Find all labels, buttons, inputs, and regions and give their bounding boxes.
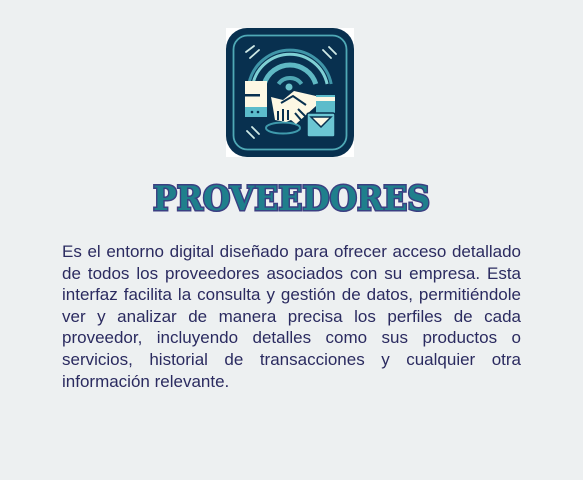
title: PROVEEDORES <box>153 179 430 219</box>
handshake <box>266 91 316 134</box>
signal arcs <box>249 50 331 90</box>
envelope <box>307 113 335 137</box>
description text block: información relevante. <box>62 372 229 391</box>
icon: handshake with wireless signal <box>226 28 354 157</box>
left card <box>245 81 267 117</box>
description text block: Es el entorno digital diseñado para ofrecer acceso detallado <box>62 242 521 261</box>
description text block: interfaz facilita la consulta y gestión de datos, permitiéndole <box>62 285 521 304</box>
description text block <box>62 242 521 391</box>
description text block: ver y analizar de manera precisa los perfiles de cada <box>62 307 521 326</box>
icon background <box>226 28 354 157</box>
corner ticks <box>246 46 336 138</box>
right card <box>316 95 335 113</box>
icon inner frame <box>234 36 346 150</box>
description text block: servicios, historial de transacciones y cualquier otra <box>62 350 521 369</box>
description text block: de todos los proveedores asociados con su empresa. Esta <box>62 264 521 283</box>
description text block: proveedor, incluyendo detalles como sus productos o <box>62 328 521 347</box>
